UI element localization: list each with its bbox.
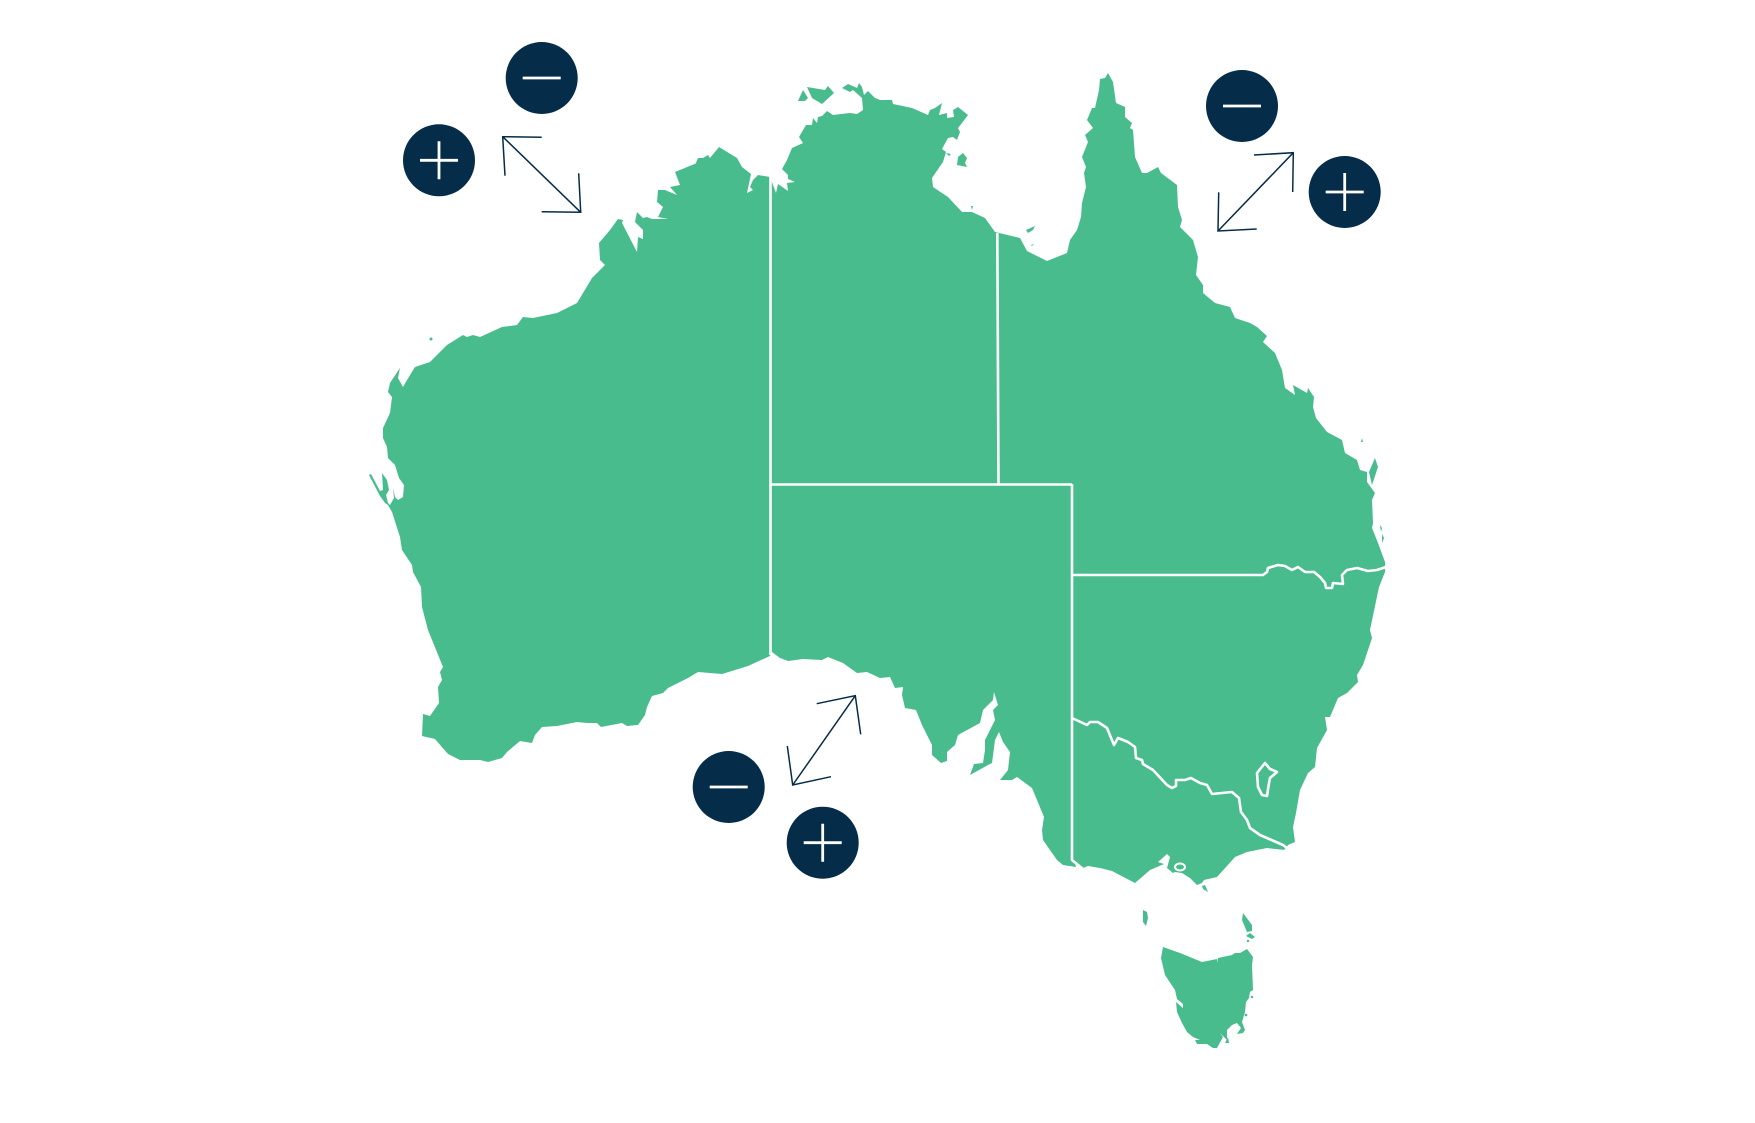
diagonal double arrow xyxy=(1218,153,1293,231)
diagonal double arrow xyxy=(503,137,581,212)
minus button xyxy=(693,751,765,823)
landmass: Tasmania xyxy=(1161,947,1253,1048)
Western Port ring xyxy=(1175,864,1185,870)
plus button xyxy=(403,124,475,196)
islands xyxy=(430,86,1384,1043)
plus button xyxy=(1309,156,1381,228)
minus button xyxy=(506,42,578,114)
diagonal double arrow xyxy=(787,696,861,785)
control group: south xyxy=(693,696,861,879)
control group: north-east xyxy=(1206,70,1381,231)
landmass: mainland xyxy=(369,73,1385,885)
state borders xyxy=(770,177,1386,869)
plus button xyxy=(787,807,859,879)
minus button xyxy=(1206,70,1278,142)
map: Australia xyxy=(369,73,1386,1048)
control group: north-west xyxy=(403,42,581,212)
